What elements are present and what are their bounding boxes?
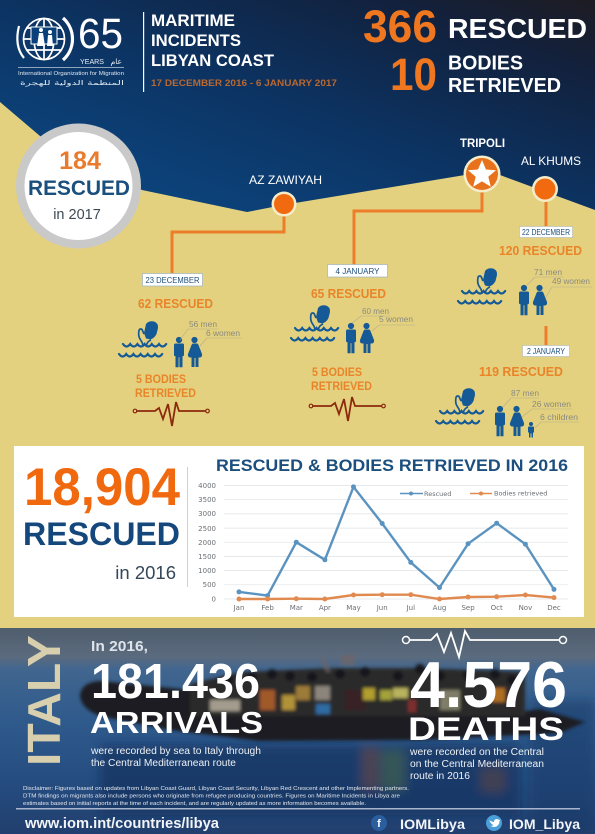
line chart: Jan <box>233 604 244 612</box>
background: sand <box>0 0 595 628</box>
incident: 22 December: 71 men <box>534 268 562 277</box>
line chart: Dec <box>547 604 561 612</box>
incident: 22 December: 22 DECEMBER <box>522 228 570 237</box>
incident: 22 December: 49 women <box>552 277 590 286</box>
photo: migrant boat at sea <box>0 628 595 834</box>
incident: 22 December <box>458 226 592 315</box>
chart heading: RESCUED & BODIES RETRIEVED IN 2016 <box>216 456 568 475</box>
header divider <box>143 12 144 92</box>
footer rule <box>16 808 580 810</box>
disclaimer: Disclaimer: Figures based on updates from Libyan Coast Guard, Libyan Coast Security, Libyan Red Crescent and other Implementing partners. <box>23 786 409 792</box>
footer: website: www.iom.int/countries/libya <box>24 815 220 832</box>
Italy deaths: DEATHS <box>408 711 564 747</box>
line chart: Oct <box>491 604 503 612</box>
headline totals: 10 <box>390 49 437 100</box>
Italy deaths: on the Central Mediterranean <box>410 759 544 770</box>
Italy arrivals: ARRIVALS <box>90 705 263 740</box>
logo: IOM 65 years: 65 <box>78 10 123 58</box>
line chart: Mar <box>290 604 303 612</box>
incident: 23 December <box>119 274 242 426</box>
location: Al Khums <box>521 154 581 202</box>
line chart: 500 <box>203 581 216 589</box>
line chart <box>198 482 568 612</box>
incident: 23 December: 5 BODIES <box>136 374 186 386</box>
Italy deaths: were recorded on the Central <box>409 747 544 758</box>
location: Tripoli <box>460 136 505 192</box>
callout: 184 rescued in 2017: in 2017 <box>53 207 101 223</box>
line chart: Apr <box>319 604 331 612</box>
incident: 23 December: 6 women <box>206 329 240 338</box>
location: Tripoli: TRIPOLI <box>460 136 505 150</box>
incident: 2 January: 119 RESCUED <box>479 364 563 379</box>
logo: IOM 65 years <box>17 10 124 87</box>
18,904 rescued in 2016: 18,904 <box>24 458 181 517</box>
chart legend <box>400 490 547 498</box>
line chart: 1000 <box>198 567 216 575</box>
incident: 23 December: RETRIEVED <box>135 388 196 400</box>
panel: 2016 statistics <box>14 446 584 617</box>
location: Az Zawiyah: AZ ZAWIYAH <box>249 173 322 187</box>
icon: white heartbeat line <box>402 631 566 657</box>
location: Al Khums: AL KHUMS <box>521 154 581 168</box>
incident: 2 January: 6 children <box>540 413 578 422</box>
footer: Facebook: f <box>377 818 381 830</box>
disclaimer <box>23 786 409 807</box>
incident: 4 January: 65 RESCUED <box>311 286 386 301</box>
Italy arrivals: were recorded by sea to Italy through <box>90 746 261 757</box>
18,904 rescued in 2016 <box>23 458 181 583</box>
logo: IOM 65 years: YEARS <box>80 57 104 66</box>
logo: IOM 65 years: عام <box>111 57 122 66</box>
line chart: Sep <box>461 604 475 612</box>
series: bodies retrieved <box>236 592 556 602</box>
18,904 rescued in 2016: RESCUED <box>23 516 180 552</box>
title: MARITIME <box>151 12 235 30</box>
callout: 184 rescued in 2017 <box>16 124 141 248</box>
line chart: May <box>346 604 361 612</box>
Italy deaths: 4.576 <box>410 648 567 721</box>
line chart: Jun <box>376 604 388 612</box>
footer: Facebook <box>371 815 465 832</box>
incident: 4 January <box>291 264 415 421</box>
incident: 23 December: 23 DECEMBER <box>146 275 200 285</box>
incident: 23 December: 62 RESCUED <box>138 296 213 311</box>
Italy arrivals: 181.436 <box>91 655 260 709</box>
title: LIBYAN COAST <box>151 52 274 70</box>
line chart: Jul <box>406 604 415 612</box>
headline totals <box>363 1 587 100</box>
incident: 4 January: 5 women <box>379 315 413 324</box>
incident: 23 December: 56 men <box>189 320 217 329</box>
18,904 rescued in 2016: in 2016 <box>115 562 176 583</box>
Italy arrivals: the Central Mediterranean route <box>91 758 236 769</box>
disclaimer: DTM findings on migrants also include persons who originate from refugee producing countries. Figures on Maritime Incidents in Libya are <box>23 794 400 800</box>
date range: 17 DECEMBER 2016 - 6 JANUARY 2017 <box>151 78 337 89</box>
incident: 22 December: 120 RESCUED <box>499 243 582 258</box>
incident: 4 January: RETRIEVED <box>311 381 372 393</box>
headline totals: RESCUED <box>448 13 587 44</box>
headline totals: RETRIEVED <box>448 75 561 97</box>
line chart: 3500 <box>198 496 216 504</box>
line chart: 4000 <box>198 482 216 490</box>
incident: 2 January: 2 JANUARY <box>527 347 566 356</box>
series: rescued <box>236 484 556 598</box>
footer: Facebook: IOMLibya <box>400 816 465 832</box>
line chart: 2000 <box>198 539 216 547</box>
line chart: 0 <box>212 596 216 604</box>
location: Az Zawiyah <box>249 173 322 216</box>
chart legend: Rescued <box>424 490 451 498</box>
logo: IOM 65 years: المنظمة الدولية للهجرة <box>20 79 124 87</box>
title: INCIDENTS <box>151 32 241 50</box>
callout: 184 rescued in 2017: 184 <box>59 147 101 175</box>
title <box>151 12 274 70</box>
line chart: 2500 <box>198 525 216 533</box>
line chart: 3000 <box>198 510 216 518</box>
callout: 184 rescued in 2017: RESCUED <box>28 177 130 200</box>
connector lines <box>172 190 546 345</box>
headline totals: BODIES <box>448 52 523 74</box>
incident: 2 January <box>436 346 579 438</box>
incident: 4 January: 60 men <box>362 307 389 316</box>
header: dark blue sky <box>0 0 595 212</box>
line chart: Feb <box>261 604 274 612</box>
logo: IOM 65 years: International Organization for Migration <box>18 71 124 77</box>
incident: 4 January: 4 JANUARY <box>336 266 380 276</box>
incident: 4 January: 5 BODIES <box>312 367 362 379</box>
Italy deaths <box>408 648 567 782</box>
Italy deaths: route in 2016 <box>410 771 470 782</box>
incident: 2 January: 87 men <box>511 389 539 398</box>
headline totals: 366 <box>363 1 437 52</box>
chart legend: Bodies retrieved <box>494 490 547 498</box>
line chart: Aug <box>433 604 446 612</box>
line chart: 1500 <box>198 553 216 561</box>
footer: Twitter: IOM_Libya <box>509 816 580 832</box>
incident: 2 January: 26 women <box>532 400 571 409</box>
Italy arrivals <box>90 638 263 769</box>
line chart: Nov <box>519 604 532 612</box>
Italy arrivals: In 2016, <box>91 638 148 655</box>
disclaimer: estimates based on initial reports at the time of each incident, and are regularly updated as more information becomes available. <box>23 801 366 807</box>
label: Italy: ITALY <box>18 635 70 766</box>
